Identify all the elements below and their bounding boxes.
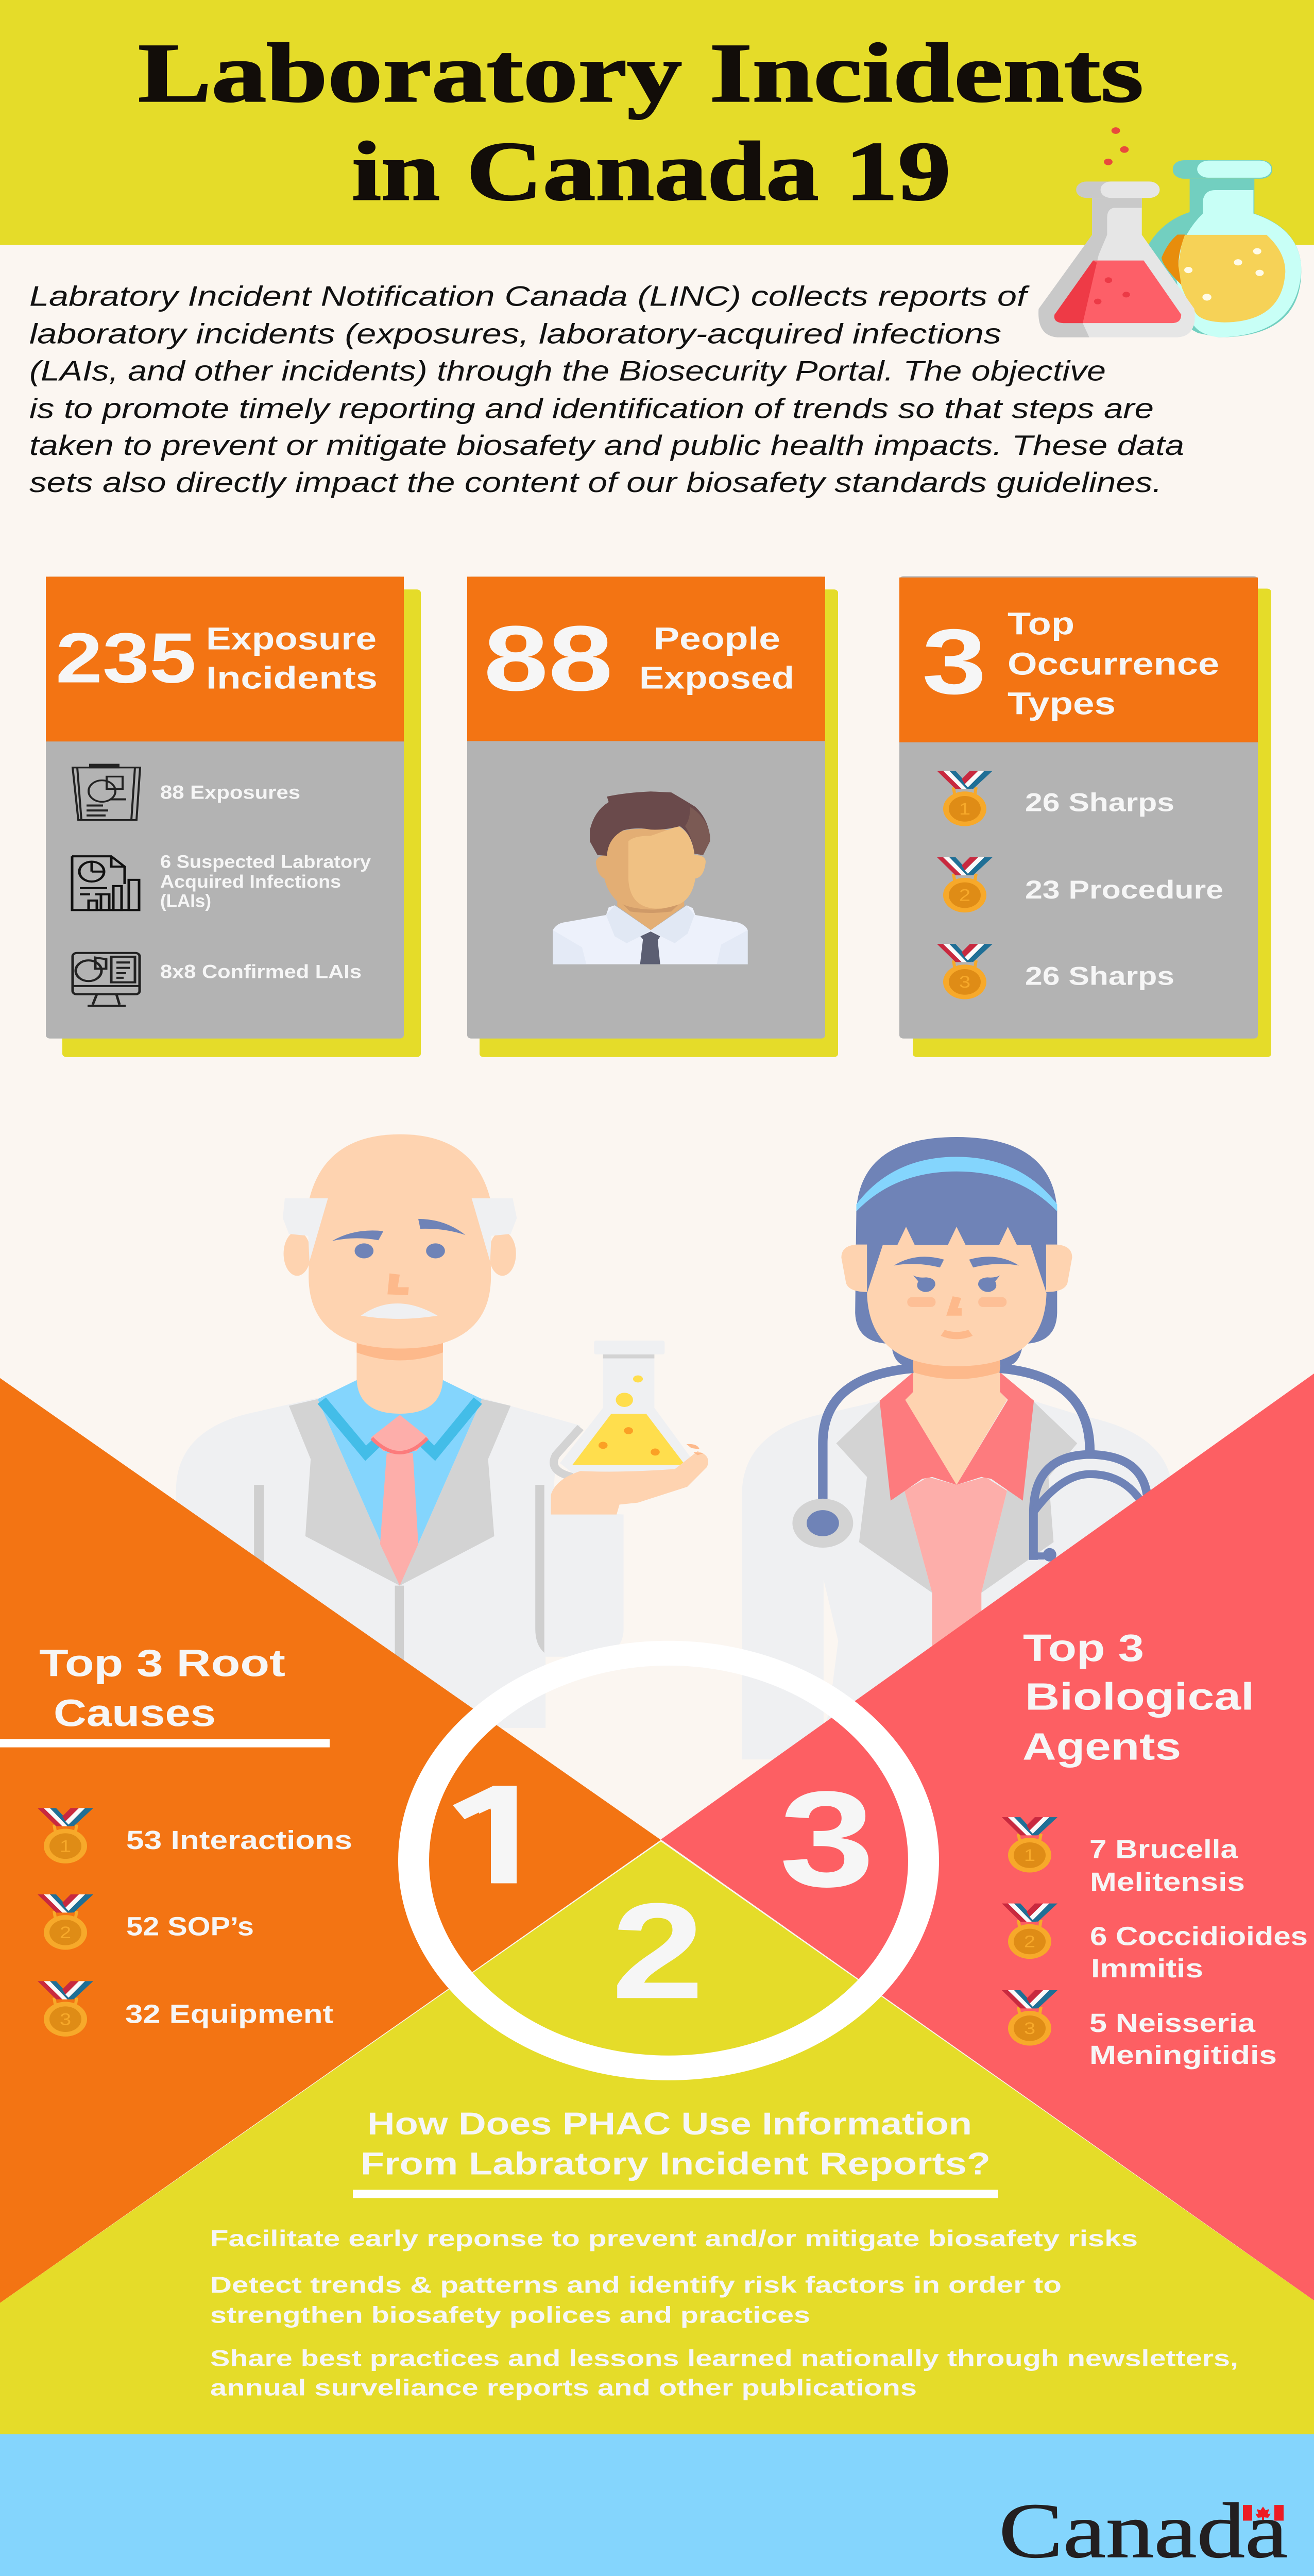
stat: 235 exposure incidents: Incidents [206,660,378,696]
underline: PHAC heading [353,2190,998,2198]
stat: 88 people exposed [484,607,794,710]
stat: 88 people exposed: Exposed [639,660,794,696]
text block: PHAC uses: Detect trends & patterns and identify risk factors in order to [210,2272,1062,2298]
icon: medal 2: 2 [959,886,970,905]
intro paragraph: (LAIs, and other incidents) through the Biosecurity Portal. The objective [29,355,1106,387]
intro paragraph: laboratory incidents (exposures, laboratory-acquired infections [29,318,1001,350]
icon: medal 2 [1002,1904,1057,1959]
text block: PHAC uses [210,2225,1238,2400]
text block: PHAC uses: Share best practices and lessons learned nationally through newsletters, [210,2345,1238,2371]
underline: root causes [0,1739,330,1748]
heading: how does PHAC use information: From Labratory Incident Reports? [361,2146,991,2181]
illustration: female scientist [742,1137,1171,1759]
text block: PHAC uses: Facilitate early reponse to prevent and/or mitigate biosafety risks [210,2225,1138,2251]
intro paragraph: taken to prevent or mitigate biosafety and public health impacts. These data [29,430,1184,461]
label: 26 sharps second: 26 Sharps [1025,961,1174,990]
panel: PHAC use background [0,1841,1314,2434]
icon: monitor with charts [73,953,140,1006]
icon: medal 2 [937,857,993,912]
stat: 235 exposure incidents: 235 [56,619,196,698]
header band [0,0,1314,245]
stat: 88 people exposed: People [654,621,780,656]
label: 6 coccidioides immitis: Immitis [1091,1954,1203,1984]
label: 7 brucella melitensis: Melitensis [1090,1867,1245,1896]
heading: how does PHAC use information [361,2106,991,2181]
heading: top 3 root causes: Top 3 Root [39,1642,285,1685]
label: 5 neisseria meningitidis: 5 Neisseria [1089,2008,1256,2038]
label: 26 sharps: 26 Sharps [1025,788,1174,817]
panel: exposure incidents [46,577,421,1057]
icon: medal 3: 3 [959,973,970,991]
text block: PHAC uses: annual surveliance reports and other publications [210,2375,917,2400]
heading: top 3 biological agents: Top 3 [1023,1627,1144,1669]
heading: top 3 root causes: Causes [54,1692,216,1735]
stat: 3 top occurrence types: 3 [922,610,986,714]
icon: medal 1: 1 [60,1837,71,1856]
stat: 3 top occurrence types: Types [1008,686,1116,721]
title: in Canada 19 [352,124,951,218]
title: Laboratory Incidents [138,26,1144,120]
panel: biological agents background [661,1374,1314,2300]
list: biological agents [1002,1817,1308,2070]
icon: medal 3 [937,944,993,999]
heading: top 3 root causes [39,1642,285,1735]
icon: medal 1 [937,771,993,826]
heading: top 3 biological agents [1022,1627,1254,1768]
label: suspected LAIs [160,852,371,911]
icon: medal 1 [38,1808,93,1863]
icon: person [553,791,748,964]
label: 7 brucella melitensis [1089,1834,1245,1896]
stat: 3 top occurrence types [922,606,1219,721]
stat: 3 top occurrence types: Occurrence [1008,646,1219,682]
label: 52 SOPs: 52 SOP’s [126,1911,254,1941]
stat: 235 exposure incidents [56,619,378,698]
icon: clipboard report [73,765,140,820]
stat: 3 top occurrence types: Top [1008,606,1074,641]
panel: occurrence types [899,577,1271,1057]
icon: medal 3: 3 [1024,2019,1035,2038]
heading: how does PHAC use information: How Does PHAC Use Information [367,2106,972,2141]
icon: laboratory flasks [1038,127,1301,337]
icon: medal 2: 2 [1024,1932,1035,1951]
label: 53 interactions: 53 Interactions [126,1825,352,1855]
heading: top 3 biological agents: Biological [1025,1675,1254,1718]
intro paragraph: sets also directly impact the content of our biosafety standards guidelines. [29,467,1162,498]
numeral 2: 2 [611,1875,704,2027]
label: 5 neisseria meningitidis: Meningitidis [1089,2040,1277,2070]
icon: medal 2 [38,1894,93,1950]
panel: people exposed [467,577,838,1057]
intro paragraph: Labratory Incident Notification Canada (LINC) collects reports of [29,281,1030,312]
numeral 3: 3 [779,1763,875,1916]
label: confirmed LAIs: 8x8 Confirmed LAIs [160,961,362,982]
label: suspected LAIs: Acquired Infections [160,872,341,892]
label: 6 coccidioides immitis [1090,1922,1308,1984]
label: suspected LAIs: (LAIs) [160,891,211,911]
numeral 1 [453,1760,540,1912]
label: 7 brucella melitensis: 7 Brucella [1089,1834,1238,1864]
label: 5 neisseria meningitidis [1089,2008,1277,2070]
label: 23 procedure: 23 Procedure [1025,875,1223,904]
illustration: male scientist [176,1134,708,1728]
icon: medal 1 [1002,1817,1057,1873]
label: 88 exposures: 88 Exposures [160,782,300,803]
numeral 1: 1 [472,1760,531,1912]
stat: 235 exposure incidents: Exposure [206,621,377,656]
stat: 88 people exposed: 88 [484,607,613,710]
intro paragraph: is to promote timely reporting and identification of trends so that steps are [29,393,1154,425]
icon: medal 3 [38,1981,93,2037]
logo: Canada wordmark: Canada [999,2488,1288,2574]
panel: root causes background [0,1378,661,2303]
icon: medal 1: 1 [1024,1846,1035,1865]
list: root causes [38,1808,352,2037]
heading: top 3 biological agents: Agents [1022,1725,1181,1768]
intro paragraph [29,281,1184,498]
icon: medal 1: 1 [959,800,970,818]
text block: PHAC uses: strengthen biosafety polices and practices [210,2302,810,2328]
icon: medal 3 [1002,1990,1057,2045]
icon: medal 2: 2 [60,1923,71,1942]
title [138,26,1144,218]
ring [414,1653,924,2068]
icon: medal 3: 3 [60,2010,71,2028]
label: 32 equipment: 32 Equipment [125,1999,333,2029]
footer band [0,2434,1314,2576]
label: suspected LAIs: 6 Suspected Labratory [160,852,371,872]
icon: document with charts [72,856,139,910]
